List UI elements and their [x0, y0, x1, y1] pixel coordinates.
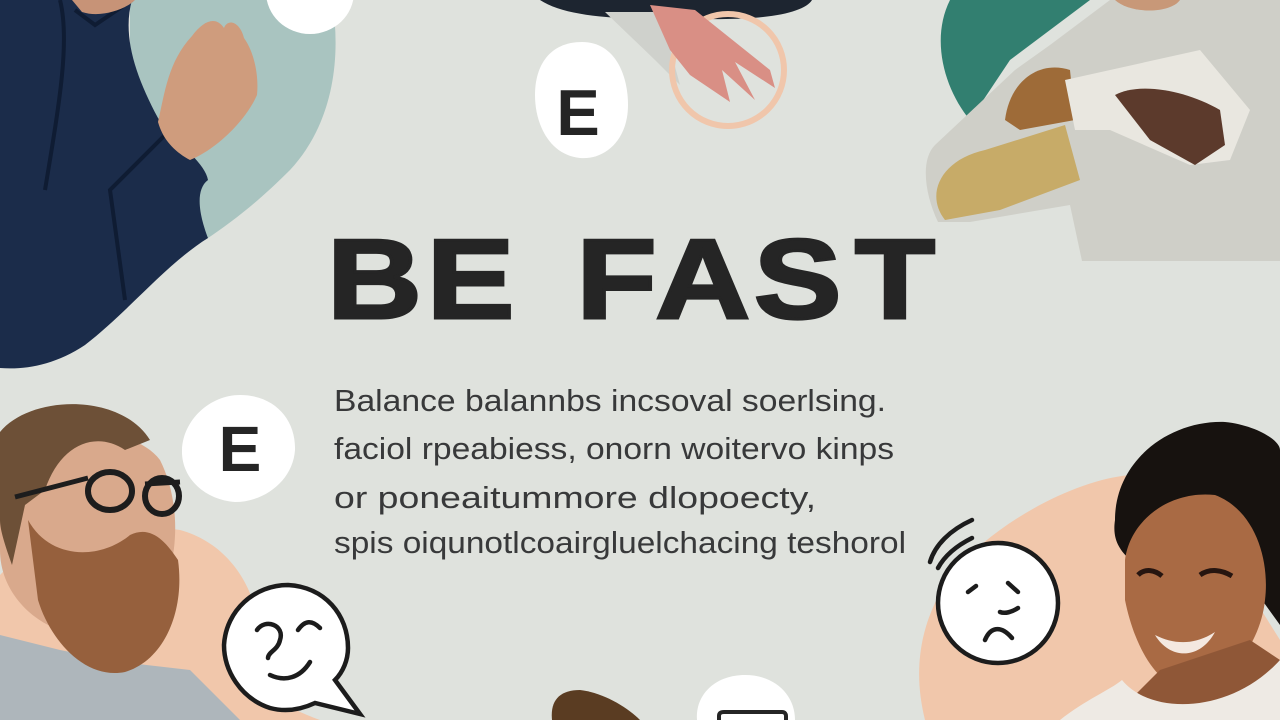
- person: glasses: [15, 478, 180, 497]
- icon: speech bubble drooping face: [224, 585, 360, 714]
- blob: peach background: [919, 475, 1280, 720]
- person: eyes and smile: [1138, 571, 1232, 576]
- badge: bottom-centre screen icon: [697, 675, 795, 720]
- person: grey shirt: [926, 0, 1280, 261]
- panel: top-centre arm and hand: [540, 0, 812, 126]
- badge: letter E top: E: [556, 76, 600, 149]
- person: tan forearm: [936, 125, 1080, 220]
- blob: green background: [941, 0, 1090, 120]
- person: raised hand: [158, 21, 257, 160]
- person: hair: [1114, 422, 1280, 625]
- icon: peach ring: [672, 14, 784, 126]
- person: dark sleeve: [540, 0, 812, 19]
- person: neck: [1115, 0, 1180, 10]
- badge: letter E left: E: [219, 413, 261, 485]
- person: navy shirt: [0, 0, 208, 368]
- person: upper arm skin: [1005, 67, 1075, 130]
- panel: bottom-centre person: [552, 690, 640, 720]
- text block: body copy: Balance balannbs incsoval soerlsing.: [334, 383, 886, 418]
- badge: letter E top: [535, 42, 628, 158]
- panel: bottom-right woman: [919, 422, 1280, 720]
- badge: letter E left: [182, 395, 295, 502]
- person: face: [1125, 494, 1266, 690]
- person: beard: [28, 520, 179, 673]
- person: pale cuff: [605, 12, 680, 85]
- person: shirt placket detail: [45, 0, 165, 300]
- text block: body copy: faciol rpeabiess, onorn woitervo kinps: [334, 431, 894, 466]
- panel: bottom-left bearded man: [0, 404, 320, 720]
- person: face: [0, 433, 175, 632]
- person: white top: [1060, 660, 1280, 720]
- text block: body copy: spis oiqunotlcoairgluelchacing teshorol: [334, 525, 906, 560]
- person: hair: [552, 690, 640, 720]
- person: hand: [650, 5, 775, 102]
- blob: peach background: [0, 527, 320, 720]
- person: hair: [0, 404, 150, 565]
- person: dark hand: [1115, 89, 1225, 165]
- text block: body copy: or poneaitummore dlopoecty,: [334, 480, 816, 515]
- text block: body copy: [334, 383, 906, 560]
- person: shirt: [0, 635, 240, 720]
- blob: pale teal background: [130, 0, 336, 240]
- title: BE FAST: [327, 216, 935, 342]
- person: neck and chest: [1110, 640, 1280, 720]
- panel: top-right person, arm symptom: [926, 0, 1280, 261]
- bubble: white circle: [266, 0, 354, 34]
- person: rolled sleeve: [1065, 50, 1250, 165]
- panel: top-left person, face symptom: [0, 0, 354, 368]
- person: neck: [72, 0, 135, 14]
- icon: sad face with sound waves: [930, 520, 1058, 663]
